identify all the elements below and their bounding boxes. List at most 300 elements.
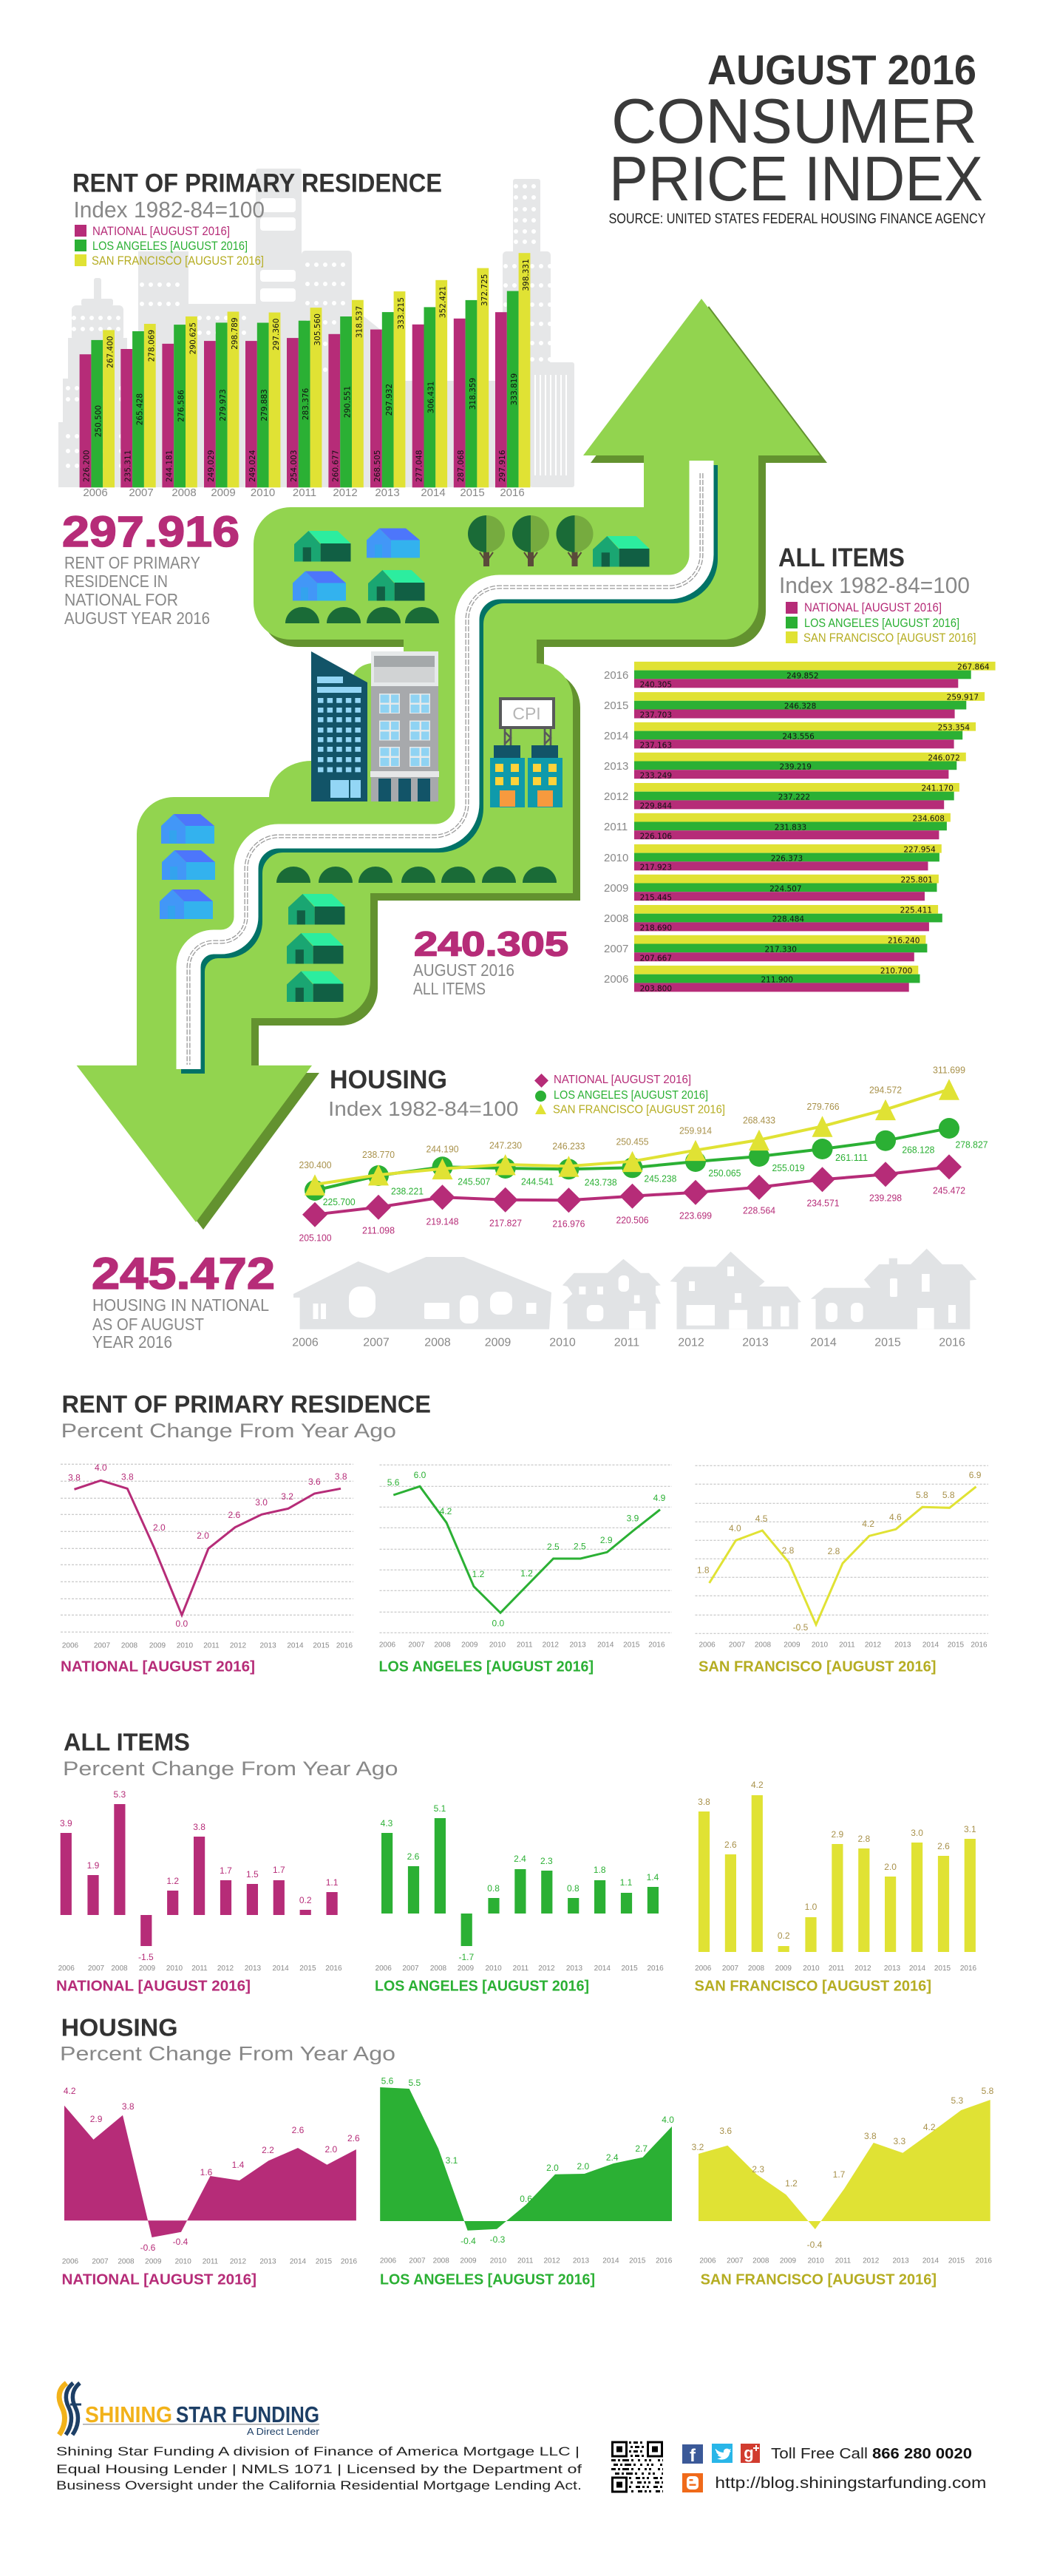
los angeles values [323, 1139, 988, 1207]
column chart: all items national: 1.5 [246, 1869, 259, 1880]
column chart: all items national: 2015 [299, 1965, 316, 1973]
los angeles values: 268.128 [902, 1144, 934, 1155]
column chart: all items san francisco: 2014 [909, 1965, 926, 1973]
rent bars 2006 [80, 330, 115, 487]
all items heading [778, 543, 970, 598]
rent bars 2006: 267.400 [106, 336, 115, 368]
all items 2013: 246.072 [928, 753, 960, 762]
line chart: rent san francisco: 4.0 [729, 1523, 741, 1533]
area chart: housing los angeles: 2016 [656, 2257, 673, 2265]
column chart: all items los angeles: -1.7 [458, 1952, 474, 1962]
rent bars 2012: 260.677 [331, 450, 340, 482]
area chart: housing national: 2.2 [262, 2145, 274, 2155]
column chart: all items national: 5.3 [114, 1789, 126, 1800]
column chart: all items san francisco: 2007 [722, 1965, 739, 1973]
los angeles values: 245.507 [458, 1176, 490, 1187]
stat: 297.916: RESIDENCE IN [64, 572, 168, 591]
housing year axis: 2008 [424, 1337, 451, 1349]
area chart: housing national: 1.6 [200, 2167, 213, 2177]
line chart: rent national: 2012 [230, 1641, 247, 1650]
column chart: all items los angeles: 2009 [458, 1965, 475, 1973]
area chart: housing san francisco: 3.3 [893, 2136, 905, 2146]
QR code [611, 2442, 663, 2492]
housing year axis: 2010 [549, 1337, 576, 1349]
area chart: housing san francisco: 2015 [948, 2257, 965, 2265]
column chart: all items los angeles: 2011 [513, 1965, 529, 1973]
all items 2015: 2015 [604, 699, 628, 712]
all items 2015: 237.703 [640, 711, 672, 720]
line chart: rent san francisco: 2015 [948, 1641, 965, 1649]
area chart: housing los angeles: 2007 [409, 2257, 426, 2265]
all items legend: SAN FRANCISCO [AUGUST 2016] [803, 631, 976, 645]
line chart: rent san francisco: 6.9 [969, 1470, 982, 1480]
column chart: all items san francisco: 2015 [934, 1965, 951, 1973]
rent year axis: 2011 [293, 487, 316, 499]
all items legend: LOS ANGELES [AUGUST 2016] [804, 616, 959, 630]
area chart: housing san francisco: 1.7 [833, 2169, 846, 2180]
legal text [56, 2444, 582, 2492]
column chart: all items national: 2007 [88, 1965, 105, 1973]
rent bars 2008 [162, 316, 197, 487]
area chart: housing los angeles: -0.3 [490, 2234, 506, 2245]
national values: 228.564 [743, 1204, 775, 1216]
all items 2016: 249.852 [786, 671, 819, 680]
logo: STAR FUNDING [176, 2402, 319, 2427]
rent bars 2010 [245, 313, 281, 487]
rent bars 2016 [495, 253, 531, 487]
rent bars 2006: 226.200 [83, 450, 92, 482]
all items heading: Index 1982-84=100 [779, 572, 970, 598]
column chart: all items national: 2012 [217, 1965, 234, 1973]
icon: facebook [682, 2444, 703, 2466]
road [188, 461, 706, 1074]
house silhouettes [293, 1249, 976, 1329]
column chart: all items los angeles: 2006 [375, 1965, 392, 1973]
toll free number: Toll Free Call [771, 2446, 868, 2462]
area chart: housing national: 2.6 [347, 2133, 360, 2143]
column chart: all items san francisco: 2.8 [857, 1834, 870, 1844]
all items 2015 [604, 692, 985, 720]
column chart: all items san francisco: 2.6 [937, 1841, 950, 1851]
all items 2010: 2010 [604, 852, 628, 864]
line chart: rent san francisco: 2016 [971, 1641, 988, 1649]
section heading: rent percent change: Percent Change From Year Ago [61, 1420, 396, 1442]
line chart: rent national: 2016 [336, 1641, 353, 1650]
area chart: housing san francisco [692, 2086, 994, 2288]
area chart: housing san francisco: 3.8 [864, 2131, 877, 2141]
rent year axis: 2008 [171, 487, 197, 499]
san francisco values: 230.400 [299, 1159, 331, 1170]
area chart: housing national: -0.6 [140, 2243, 156, 2253]
stat: 245.472: 245.472 [92, 1249, 275, 1298]
column chart: all items san francisco: 2013 [884, 1965, 901, 1973]
line chart: rent national: 3.0 [255, 1497, 268, 1508]
area chart: housing national: 2009 [145, 2258, 162, 2266]
area chart: housing los angeles: 2.4 [606, 2152, 619, 2163]
column chart: all items los angeles: 2007 [402, 1965, 419, 1973]
rent bars 2013 [370, 291, 406, 487]
all items 2011 [604, 813, 951, 841]
san francisco values: 250.455 [616, 1136, 649, 1147]
column chart: all items san francisco: 2.6 [724, 1840, 737, 1850]
line chart: rent national: 2014 [287, 1641, 304, 1650]
rent year axis: 2007 [129, 487, 154, 499]
housing legend: SAN FRANCISCO [AUGUST 2016] [553, 1104, 725, 1116]
national values: 234.571 [807, 1197, 840, 1208]
column chart: all items national: NATIONAL [AUGUST 2016] [56, 1979, 251, 1995]
area chart: housing national: 2014 [290, 2258, 307, 2266]
housing legend: NATIONAL [AUGUST 2016] [554, 1074, 691, 1086]
area chart: housing national: 2.9 [90, 2114, 103, 2124]
all items 2013 [604, 753, 966, 780]
line chart: rent san francisco: 4.6 [889, 1512, 902, 1522]
column chart: all items san francisco: 2.9 [832, 1829, 844, 1840]
line chart: rent los angeles: 3.9 [627, 1513, 639, 1523]
column chart: all items san francisco: 3.8 [698, 1797, 710, 1807]
area chart: housing los angeles: 2011 [517, 2257, 534, 2265]
toll free number [771, 2446, 972, 2462]
column chart: all items national: 2008 [111, 1965, 128, 1973]
area chart: housing los angeles: 2013 [573, 2257, 590, 2265]
housing year axis: 2013 [742, 1337, 769, 1349]
logo [59, 2383, 319, 2437]
rent bars 2014 [412, 280, 448, 487]
area chart: housing national: 2015 [316, 2258, 333, 2266]
area chart: housing los angeles: 2006 [380, 2257, 397, 2265]
rent bars 2015 [454, 268, 489, 487]
column chart: all items los angeles: 2015 [621, 1965, 638, 1973]
area chart: housing national: 2007 [92, 2258, 109, 2266]
stat: 297.916: AUGUST YEAR 2016 [64, 609, 210, 628]
area chart: housing san francisco: 3.6 [719, 2126, 732, 2136]
column chart: all items los angeles: 2013 [566, 1965, 583, 1973]
line chart: rent los angeles: 2008 [434, 1641, 451, 1649]
line chart: rent los angeles: 0.0 [492, 1618, 505, 1628]
CPI billboard and shops [490, 699, 563, 807]
line chart: rent national: 0.0 [176, 1619, 188, 1629]
line chart: rent national: 3.6 [308, 1477, 321, 1487]
rent bars 2015: 287.068 [457, 450, 466, 482]
rent year axis: 2010 [251, 487, 275, 499]
area chart: housing san francisco: 2012 [863, 2257, 880, 2265]
rent year axis: 2013 [375, 487, 400, 499]
rent bars 2009: 249.029 [207, 450, 216, 482]
housing year axis: 2011 [614, 1337, 639, 1349]
column chart: all items national: 1.7 [273, 1865, 285, 1875]
rent bars 2009: 298.789 [231, 318, 239, 350]
area chart: housing los angeles: 3.1 [446, 2155, 458, 2166]
rent year axis: 2012 [333, 487, 358, 499]
line chart: rent los angeles: 2009 [461, 1641, 478, 1649]
icon: google plus [741, 2444, 760, 2463]
housing line chart [299, 1064, 988, 1243]
column chart: all items san francisco: 1.0 [805, 1902, 818, 1912]
line chart: rent san francisco: 2.8 [828, 1546, 840, 1556]
all items 2007: 216.240 [888, 936, 920, 945]
line chart: rent los angeles: 2.9 [600, 1535, 613, 1545]
area chart: housing national: 2.6 [292, 2125, 305, 2135]
line chart: rent los angeles: 4.9 [653, 1493, 666, 1503]
rent bars 2012: 318.537 [355, 306, 364, 338]
legal text: Business Oversight under the California Residential Mortgage Lending Act. [56, 2478, 582, 2492]
all items 2007 [604, 935, 927, 963]
rent legend: NATIONAL [AUGUST 2016] [92, 224, 230, 238]
section heading: housing percent change [60, 2013, 395, 2065]
rent heading: Index 1982-84=100 [74, 197, 265, 223]
housing heading: Index 1982-84=100 [328, 1097, 519, 1120]
los angeles values: 243.738 [585, 1176, 617, 1187]
section heading: rent percent change: RENT OF PRIMARY RESIDENCE [62, 1391, 431, 1418]
houses upper panel [293, 528, 649, 600]
area chart: housing national: 3.8 [122, 2101, 135, 2112]
logo swoosh [59, 2383, 81, 2435]
national values: 223.699 [679, 1210, 712, 1221]
section heading: housing percent change: Percent Change From Year Ago [60, 2043, 395, 2065]
area chart: housing los angeles: 2015 [629, 2257, 646, 2265]
column chart: all items los angeles: 2.4 [514, 1854, 526, 1864]
rent bars 2009 [204, 312, 239, 487]
los angeles series [305, 1118, 959, 1201]
column chart: all items national: 1.1 [326, 1877, 339, 1888]
column chart: all items national: 2010 [166, 1965, 183, 1973]
all items 2015: 246.328 [784, 702, 816, 711]
area chart: housing los angeles: 4.0 [662, 2115, 674, 2125]
line chart: rent national: 3.8 [68, 1473, 81, 1483]
column chart: all items san francisco: 2010 [803, 1965, 820, 1973]
stat: 240.305: ALL ITEMS [413, 979, 486, 998]
column chart: all items los angeles: 2016 [647, 1965, 664, 1973]
rent bars 2011: 305.560 [313, 313, 322, 346]
column chart: all items los angeles: 4.3 [381, 1818, 393, 1828]
column chart: all items national: -1.5 [138, 1952, 154, 1962]
column chart: all items san francisco: 2012 [854, 1965, 871, 1973]
line chart: rent san francisco: 2006 [699, 1641, 716, 1649]
column chart: all items national: 2009 [139, 1965, 156, 1973]
line chart: rent los angeles: 2.5 [574, 1541, 586, 1551]
line chart: rent san francisco: 2011 [839, 1641, 855, 1649]
all items 2011: 2011 [604, 821, 628, 833]
rent bars 2011: 283.376 [302, 387, 310, 420]
all items 2014: 243.556 [782, 732, 815, 741]
column chart: all items national: 1.9 [87, 1860, 100, 1871]
area chart: housing san francisco: 2010 [808, 2257, 824, 2265]
area chart: housing san francisco: 2014 [922, 2257, 939, 2265]
rent bars 2008: 290.625 [188, 322, 197, 354]
line chart: rent national: 2010 [177, 1641, 194, 1650]
dark blue office building [311, 651, 367, 801]
all items 2009: 2009 [604, 882, 628, 895]
title block: PRICE INDEX [609, 144, 983, 214]
column chart: all items los angeles: 1.8 [594, 1865, 606, 1875]
area chart: housing los angeles: 2008 [433, 2257, 449, 2265]
all items 2012: 241.170 [921, 784, 954, 793]
rent heading: RENT OF PRIMARY RESIDENCE [72, 169, 442, 198]
title block: SOURCE: UNITED STATES FEDERAL HOUSING FINANCE AGENCY [609, 211, 986, 227]
line chart: rent los angeles: 2010 [489, 1641, 506, 1649]
all items 2010 [604, 844, 942, 872]
line chart: rent san francisco: 2010 [812, 1641, 829, 1649]
line chart: rent san francisco: 2009 [784, 1641, 801, 1649]
line chart: rent national: 2007 [94, 1641, 111, 1650]
housing year axis [292, 1337, 965, 1349]
column chart: all items national: 3.9 [60, 1818, 72, 1828]
column chart: all items los angeles: 2.6 [407, 1851, 420, 1862]
title block: AUGUST 2016 [707, 47, 976, 94]
section heading: housing percent change: HOUSING [61, 2013, 178, 2041]
green houses lower panel [287, 894, 344, 1002]
rent bars 2011 [287, 308, 322, 487]
area chart: housing san francisco: 2011 [835, 2257, 852, 2265]
column chart: all items san francisco: 3.1 [964, 1824, 976, 1834]
all items 2006: 2006 [604, 973, 628, 986]
column chart: all items national: 1.2 [166, 1876, 179, 1886]
national series [302, 1154, 962, 1227]
all items 2009: 215.445 [640, 893, 672, 902]
column chart: all items los angeles: 2014 [594, 1965, 611, 1973]
CPI billboard and shops: CPI [512, 704, 541, 723]
line chart: rent san francisco [695, 1465, 988, 1675]
all items 2008: 218.690 [640, 924, 672, 933]
section heading: all items percent change: Percent Change From Year Ago [63, 1758, 398, 1780]
area chart: housing los angeles [380, 2075, 674, 2288]
column chart: all items san francisco [695, 1780, 977, 1995]
line chart: rent los angeles: 4.2 [440, 1506, 452, 1516]
area chart: housing san francisco: 1.2 [785, 2178, 798, 2189]
san francisco values: 238.770 [362, 1149, 395, 1160]
line chart: rent los angeles: 2013 [569, 1641, 586, 1649]
section heading: all items percent change: ALL ITEMS [64, 1729, 190, 1756]
line chart: rent national: 3.2 [281, 1491, 293, 1502]
all items 2014: 253.354 [938, 723, 970, 732]
all items heading: ALL ITEMS [778, 543, 905, 572]
column chart: all items national: 2006 [58, 1965, 75, 1973]
column chart: all items los angeles: 5.1 [434, 1803, 446, 1814]
san francisco values: 294.572 [869, 1084, 902, 1095]
line chart: rent san francisco: 5.8 [916, 1490, 928, 1500]
line chart: rent los angeles: 2007 [408, 1641, 425, 1649]
line chart: rent national: 2013 [259, 1641, 276, 1650]
housing year axis: 2012 [678, 1337, 704, 1349]
section heading: all items percent change [63, 1729, 398, 1780]
area chart: housing national: 2006 [62, 2258, 79, 2266]
area chart: housing los angeles: LOS ANGELES [AUGUST 2016] [380, 2272, 595, 2288]
los angeles values: 225.700 [323, 1196, 356, 1207]
column chart: all items los angeles: 0.8 [567, 1883, 580, 1894]
line chart: rent national: 3.8 [121, 1471, 134, 1482]
all items 2011: 234.608 [912, 814, 945, 823]
column chart: all items national: 2013 [245, 1965, 262, 1973]
column chart: all items san francisco: 2.0 [884, 1862, 897, 1872]
rent bars 2006: 250.500 [95, 405, 103, 437]
area chart: housing san francisco: 2016 [976, 2257, 992, 2265]
all items 2007: 217.330 [764, 945, 797, 954]
rent bar chart [80, 253, 531, 499]
all items 2009: 225.801 [900, 875, 933, 884]
legal text: Shining Star Funding A division of Finance of America Mortgage LLC | [56, 2444, 580, 2458]
column chart: all items san francisco: SAN FRANCISCO [AUGUST 2016] [695, 1979, 931, 1995]
all items 2008: 225.411 [900, 906, 932, 915]
housing year axis: 2015 [874, 1337, 901, 1349]
san francisco values: 246.233 [552, 1140, 585, 1151]
all items 2006: 210.700 [880, 967, 912, 976]
line chart: rent san francisco: 2007 [729, 1641, 746, 1649]
rent bars 2007: 265.428 [135, 393, 144, 425]
rent year axis: 2009 [211, 487, 236, 499]
skyline silhouette [58, 169, 574, 487]
column chart: all items los angeles: 1.1 [620, 1877, 633, 1888]
area chart: housing los angeles: 5.6 [381, 2075, 394, 2086]
housing legend [534, 1074, 725, 1116]
line chart: rent los angeles: 1.2 [472, 1569, 485, 1579]
line chart: rent san francisco: SAN FRANCISCO [AUGUST 2016] [699, 1659, 936, 1675]
all items 2007: 2007 [604, 943, 628, 955]
national values: 219.148 [426, 1216, 458, 1227]
section heading: rent percent change [61, 1391, 431, 1442]
title block [609, 47, 986, 227]
rent heading [72, 169, 442, 223]
area chart: housing los angeles: 5.5 [408, 2078, 421, 2088]
san francisco values: 259.914 [679, 1125, 712, 1136]
line chart: rent san francisco: 2013 [894, 1641, 911, 1649]
column chart: all items san francisco: 2006 [695, 1965, 712, 1973]
rent bars 2014: 277.048 [415, 450, 424, 482]
rent bars 2012: 290.551 [343, 386, 352, 418]
housing heading: HOUSING [330, 1065, 447, 1094]
area chart: housing san francisco: -0.4 [807, 2240, 823, 2250]
area chart: housing los angeles: 2012 [543, 2257, 560, 2265]
column chart: all items national: 2014 [272, 1965, 289, 1973]
column chart: all items national: 1.7 [220, 1865, 232, 1876]
line chart: rent national [61, 1462, 353, 1675]
rent year axis: 2014 [421, 487, 446, 499]
column chart: all items san francisco: 2011 [829, 1965, 845, 1973]
all items 2008: 228.484 [772, 915, 804, 924]
rent bars 2007: 235.311 [123, 450, 132, 482]
rent bars 2010: 249.024 [248, 450, 257, 482]
line chart: rent los angeles: 2016 [648, 1641, 665, 1649]
line chart: rent los angeles: LOS ANGELES [AUGUST 2016] [378, 1659, 594, 1675]
national values: 205.100 [299, 1232, 331, 1243]
column chart: all items los angeles: LOS ANGELES [AUGUST 2016] [375, 1979, 589, 1995]
area chart: housing san francisco: 5.3 [951, 2095, 964, 2106]
all items 2014 [604, 722, 976, 750]
line chart: rent los angeles: 2015 [623, 1641, 640, 1649]
all items 2013: 233.249 [640, 771, 672, 780]
all items legend [786, 600, 976, 645]
area chart: housing san francisco: 2006 [699, 2257, 716, 2265]
line chart: rent los angeles: 2011 [517, 1641, 533, 1649]
line chart: rent los angeles [378, 1465, 672, 1675]
los angeles values: 261.111 [835, 1152, 868, 1163]
area chart: housing national: 2011 [203, 2258, 219, 2266]
all items 2006: 203.800 [640, 985, 672, 994]
line chart: rent national: 3.8 [335, 1471, 347, 1482]
line chart: rent national: 2009 [149, 1641, 166, 1650]
housing year axis: 2007 [363, 1337, 390, 1349]
legal text: Equal Housing Lender | NMLS 1071 | Licensed by the Department of [56, 2462, 582, 2476]
title block: CONSUMER [611, 87, 977, 157]
line chart: rent national: 2006 [62, 1641, 79, 1650]
column chart: all items national: 2011 [191, 1965, 208, 1973]
housing year axis: 2016 [939, 1337, 965, 1349]
all items 2010: 227.954 [903, 845, 936, 854]
line chart: rent los angeles: 2014 [597, 1641, 614, 1649]
area chart: housing national: 2008 [118, 2258, 135, 2266]
all items 2007: 207.667 [640, 954, 672, 963]
bushes lower panel [276, 867, 557, 883]
stat: 245.472: HOUSING IN NATIONAL [92, 1295, 269, 1315]
area chart: housing san francisco: 2013 [892, 2257, 909, 2265]
